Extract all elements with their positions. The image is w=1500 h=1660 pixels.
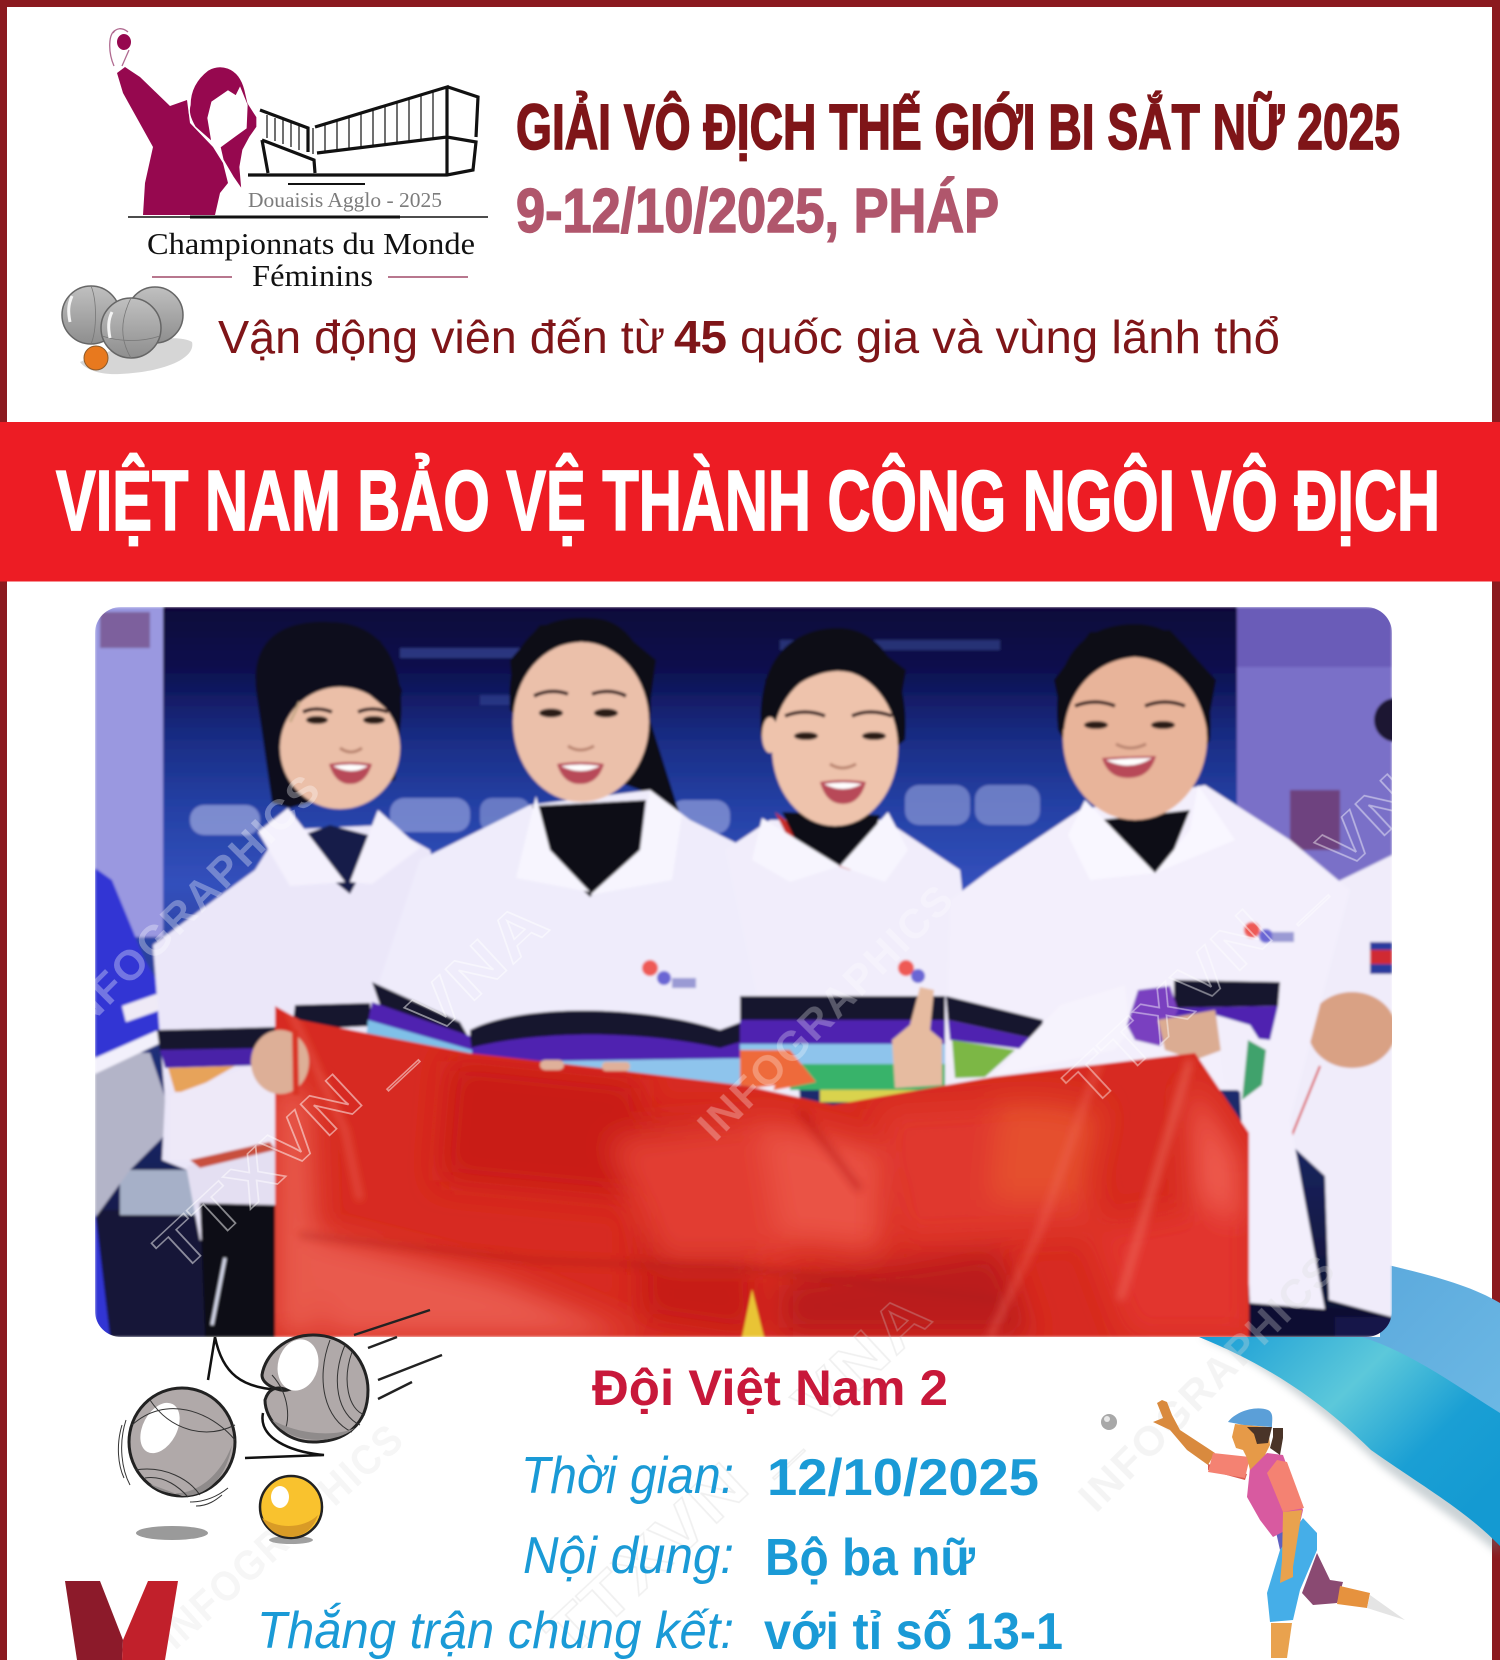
red banner	[0, 422, 1500, 582]
illustration: flying petanque balls	[118, 1310, 442, 1544]
photo: Vietnam team with flag	[95, 607, 1418, 1340]
label: time: Thời gian:	[521, 1447, 734, 1505]
logo text: Championnats du Monde: Championnats du Monde	[147, 226, 475, 261]
team name: Đội Việt Nam 2	[592, 1360, 948, 1416]
person 2	[366, 618, 800, 1100]
person 1	[150, 621, 433, 1337]
ribbon	[1199, 1263, 1500, 1555]
watermarks: TTXVN _ VNA	[1052, 722, 1473, 1120]
watermarks: INFOGRAPHICS	[688, 874, 963, 1149]
person 4	[945, 624, 1350, 1337]
hands holding flag	[251, 1030, 630, 1095]
big V letter	[65, 1581, 178, 1660]
logo: Championnats du Monde Féminins	[110, 29, 488, 293]
logo text: Douaisis Agglo: Douaisis Agglo - 2025	[248, 188, 442, 212]
right neighbour	[1262, 698, 1418, 1337]
icon: petanque balls	[62, 286, 192, 374]
date and place: 9-12/10/2025, PHÁP	[516, 177, 999, 246]
detail rows	[257, 1447, 1063, 1660]
logo text: Féminins: Féminins	[252, 258, 373, 293]
value: score: với tỉ số 13-1	[764, 1603, 1063, 1660]
icon: woman silhouette	[110, 29, 257, 215]
value: event: Bộ ba nữ	[765, 1529, 975, 1587]
background LED boards	[95, 607, 1392, 1337]
flag star tip	[742, 1289, 764, 1337]
watermarks: INFOGRAPHICS	[48, 764, 330, 1046]
person 3	[725, 628, 980, 1122]
watermarks	[48, 722, 1473, 1660]
watermarks: TTXVN _ VNA	[142, 887, 563, 1285]
left neighbour sleeve	[95, 868, 184, 1337]
illustration: woman throwing petanque ball	[1101, 1400, 1405, 1658]
Vietnamese flag	[260, 990, 1260, 1340]
icon: building	[128, 87, 488, 217]
ball in air	[1101, 1414, 1117, 1430]
subtitle: athletes from 45 countries	[218, 311, 1280, 363]
watermarks: INFOGRAPHICS	[1069, 1245, 1345, 1520]
subtitle: athletes from 45 countries: quốc gia và vùng lãnh thổ	[740, 311, 1280, 363]
watermarks: INFOGRAPHICS	[150, 1414, 413, 1658]
subtitle: athletes from 45 countries: 45	[674, 311, 727, 363]
value: date: 12/10/2025	[767, 1449, 1039, 1507]
subtitle: athletes from 45 countries: Vận động viên đến từ	[218, 311, 665, 363]
label: event: Nội dung:	[523, 1527, 734, 1585]
label: final: Thắng trận chung kết:	[257, 1602, 734, 1660]
